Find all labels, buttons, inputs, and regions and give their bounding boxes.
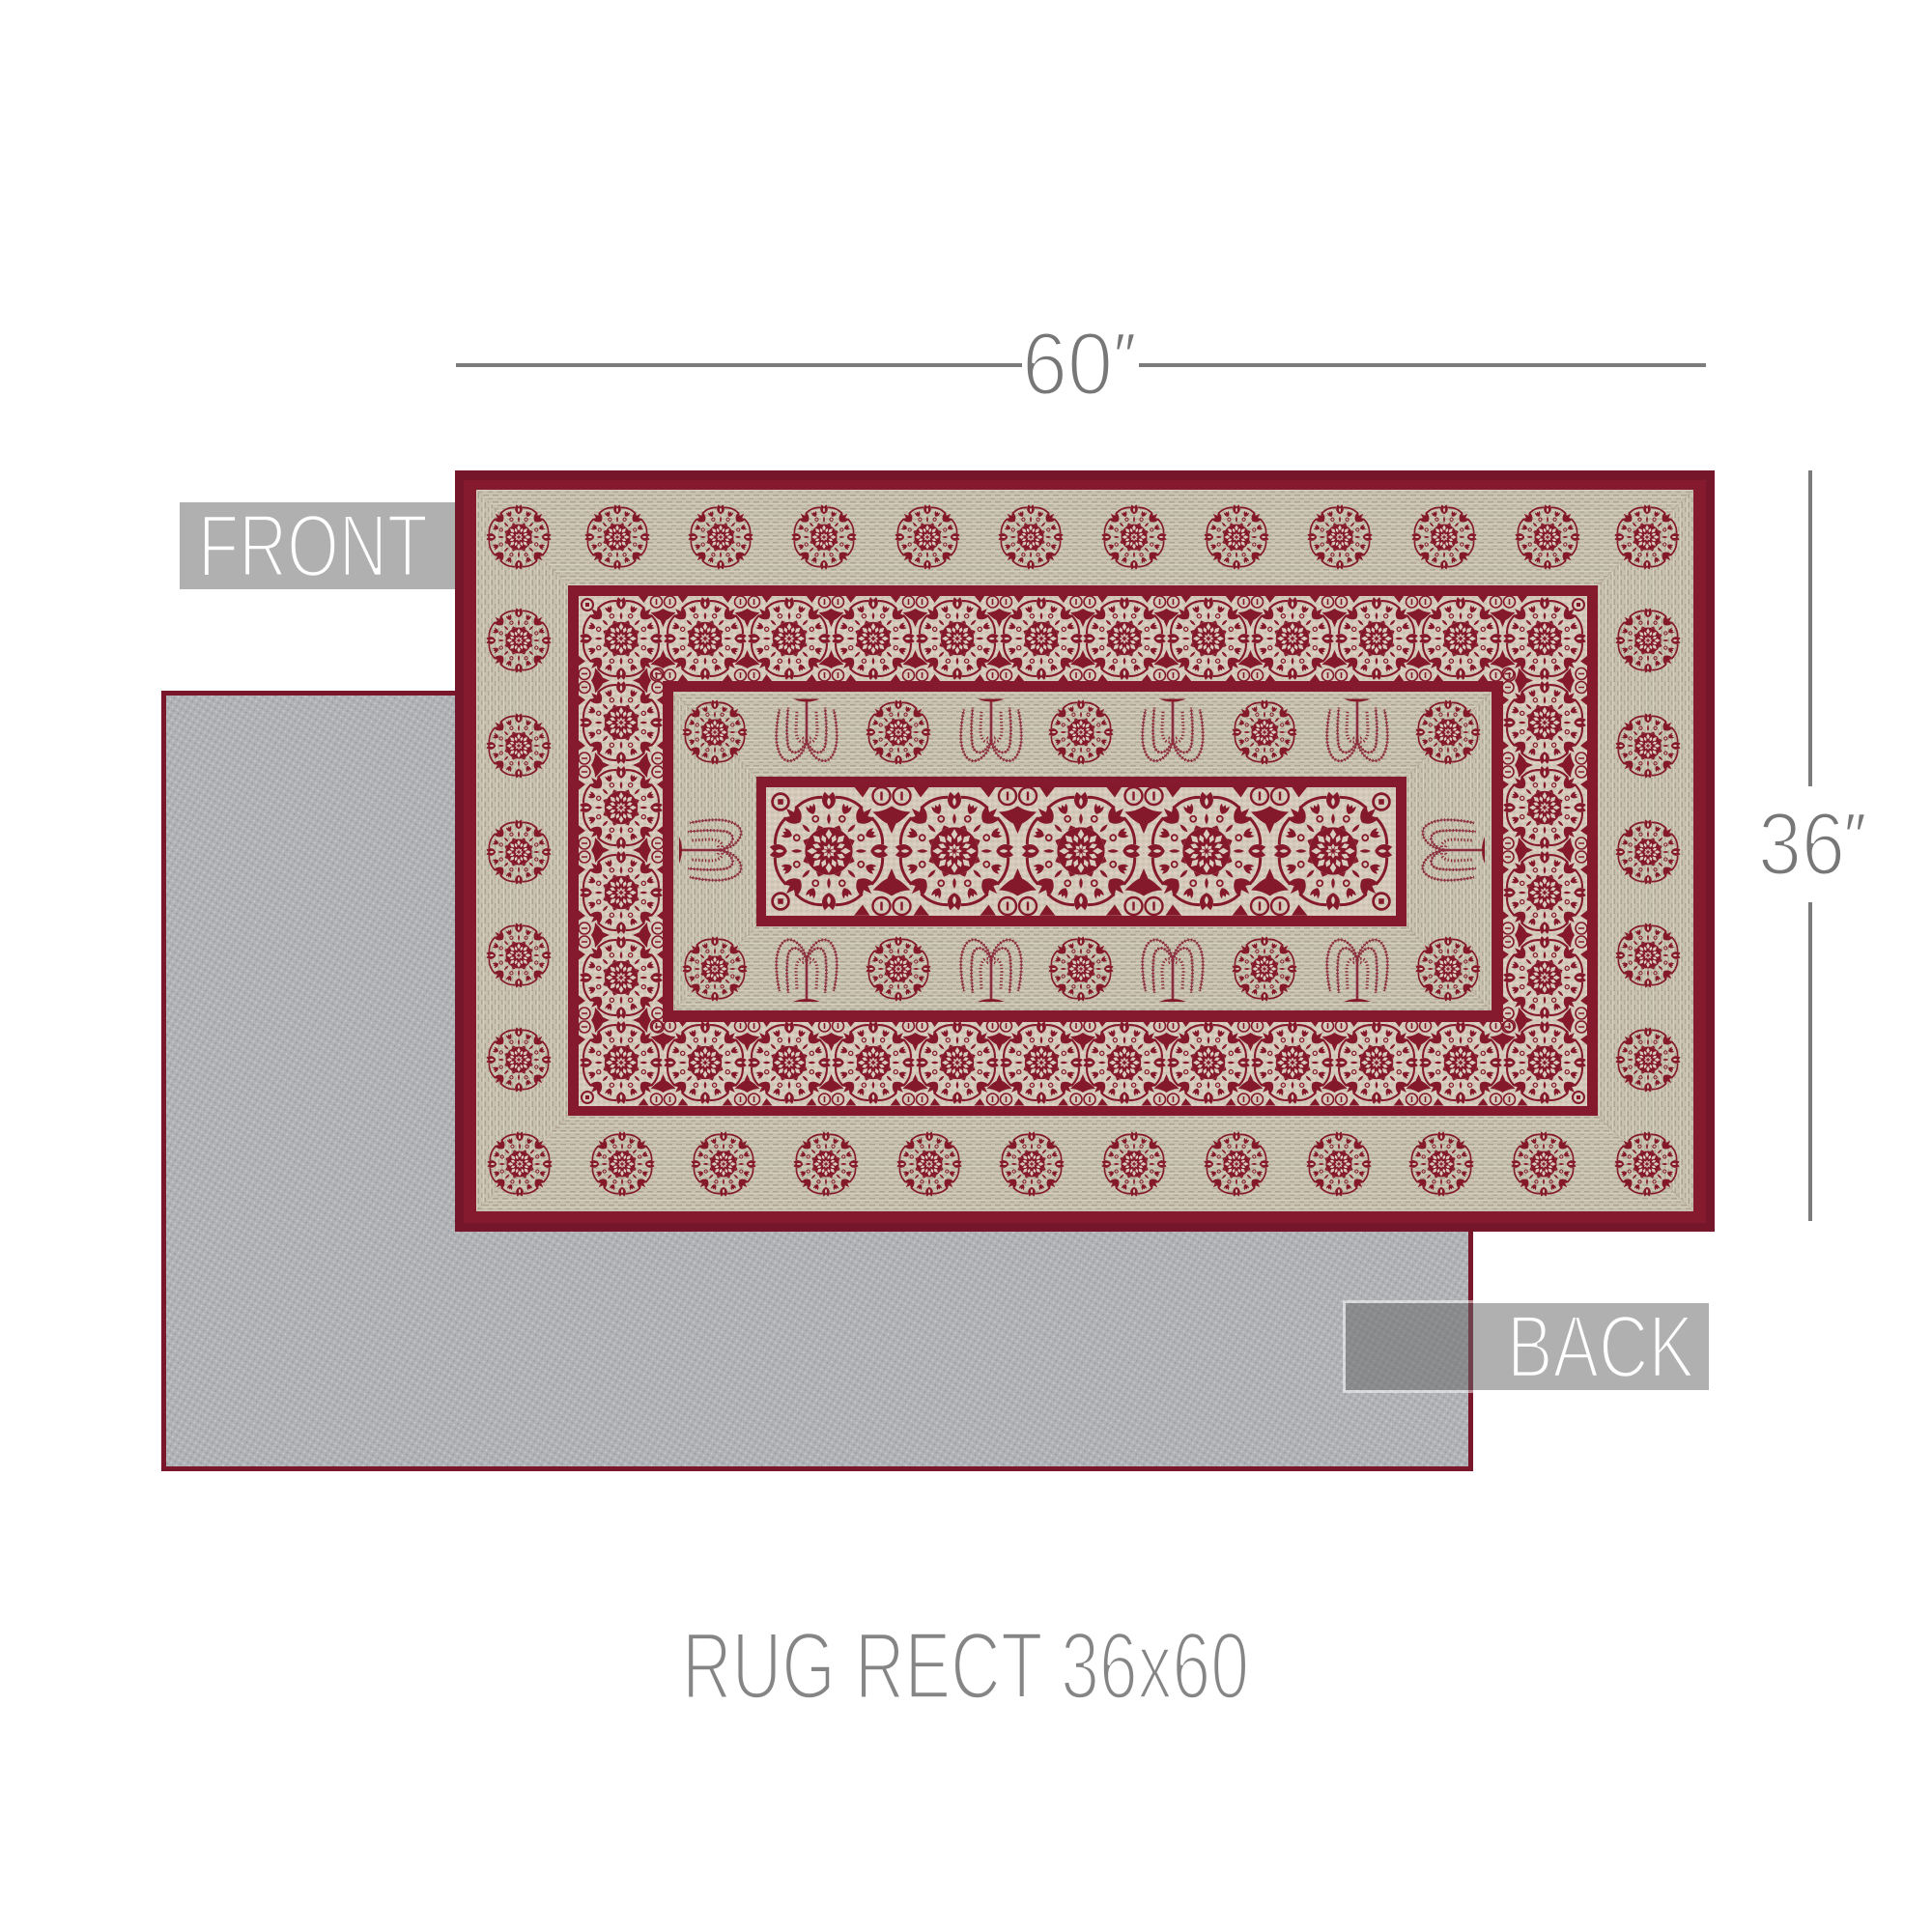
rug outer border bbox=[455, 470, 1715, 1232]
inner field medallions bbox=[679, 696, 1484, 1005]
panel: back of rug bbox=[161, 691, 1473, 1471]
outer beige field bbox=[476, 490, 1693, 1211]
willow trees bbox=[679, 699, 1485, 1002]
band medallions and links bbox=[576, 593, 1590, 1108]
dimension: height 36 inches bbox=[1758, 470, 1865, 1221]
dimension: height 36 inches: 36 bbox=[1758, 795, 1845, 894]
dimension: width 60 inches: 60 bbox=[1022, 315, 1113, 413]
title: RUG RECT 36x60 bbox=[682, 1612, 1249, 1719]
centre panel bbox=[756, 777, 1406, 926]
dimension: width 60 inches bbox=[456, 315, 1706, 413]
dimension: width 60 inches: ″ bbox=[1111, 321, 1135, 390]
label: BACK: BACK bbox=[1507, 1298, 1694, 1397]
label: BACK bbox=[1345, 1298, 1709, 1397]
patterned band frame bbox=[568, 585, 1598, 1116]
panel: front of rug bbox=[455, 470, 1715, 1232]
inner field frame bbox=[663, 681, 1503, 1022]
outer medallions bbox=[483, 501, 1684, 1200]
label: FRONT: FRONT bbox=[198, 497, 428, 595]
dimension: height 36 inches: ″ bbox=[1841, 801, 1865, 870]
